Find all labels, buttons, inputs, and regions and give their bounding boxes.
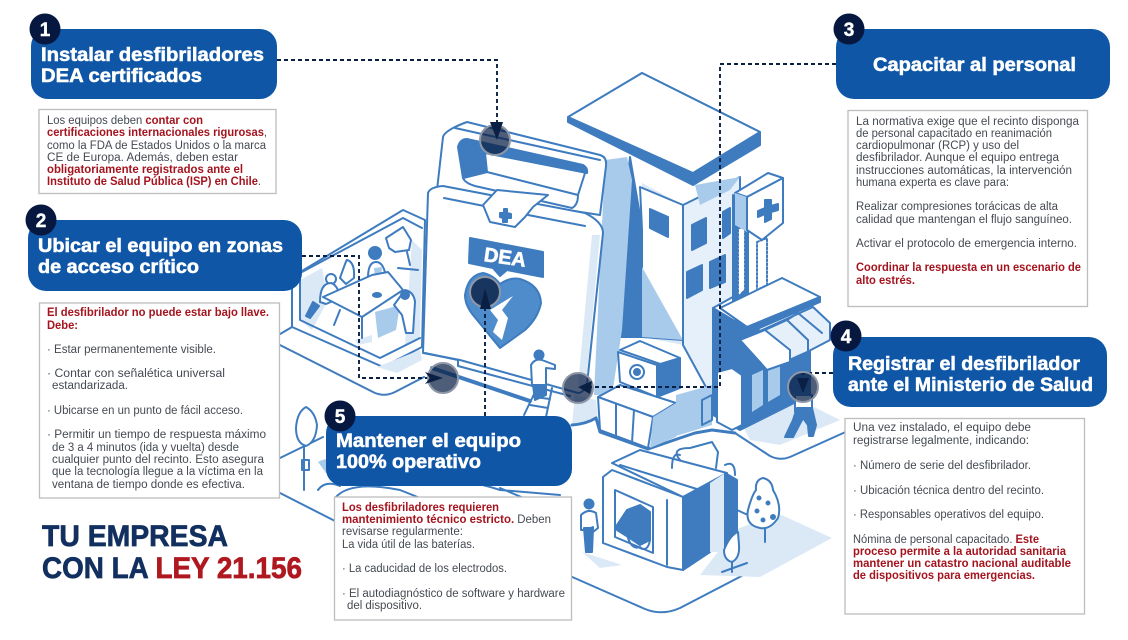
panel 4 text: Una vez instalado, el equipo debe	[853, 422, 1031, 434]
panel 2 header: de acceso crítico	[38, 257, 199, 278]
trees	[296, 407, 779, 572]
panel 2 text: ventana de tiempo donde es efectiva.	[52, 479, 245, 491]
panel 1 text: Los equipos deben contar con	[47, 115, 203, 127]
panel 3 header: 3	[844, 20, 854, 41]
panel 3 text: La normativa exige que el recinto disponga	[856, 116, 1080, 128]
marker 3	[563, 373, 593, 403]
panel 4 text: proceso permite a la autoridad sanitaria	[853, 546, 1067, 558]
panel 2 text: · Contar con señalética universal	[47, 368, 225, 380]
title: TU EMPRESA	[42, 520, 228, 553]
defibrillator case	[423, 122, 632, 401]
panel 2 text: que la tecnología llegue a la víctima en la	[52, 466, 264, 478]
meeting room	[292, 210, 425, 373]
hospital building	[568, 73, 767, 400]
panel 4 text: · Ubicación técnica dentro del recinto.	[853, 485, 1044, 497]
marker 5	[470, 277, 500, 309]
person: walking	[785, 395, 816, 437]
panel 3 text	[848, 110, 1088, 306]
cabinet with device	[598, 341, 712, 448]
panel 1 header: 1	[40, 20, 51, 41]
panel 4 text: de dispositivos para emergencias.	[853, 570, 1035, 582]
panel 4 header: 4	[841, 327, 852, 348]
shop	[713, 278, 830, 430]
panel 5 text: La vida útil de las baterías.	[342, 539, 475, 551]
panel 2 text: estandarizada.	[52, 380, 128, 392]
panel 3 text: de personal capacitado en reanimación	[856, 128, 1052, 140]
panel 3 text: instrucciones automáticas, la intervención	[856, 165, 1072, 177]
panel 1 text	[39, 110, 276, 194]
panel 3 text: Activar el protocolo de emergencia interno.	[856, 238, 1077, 250]
connector 5	[484, 300, 486, 416]
panel 2 header: 2	[36, 211, 46, 232]
connector 1	[277, 60, 497, 130]
panel 4 text: mantener un catastro nacional auditable	[853, 558, 1071, 570]
kiosk building	[603, 442, 737, 570]
marker 2	[425, 363, 458, 393]
panel 2 text: · Ubicarse en un punto de fácil acceso.	[47, 405, 243, 417]
marker 1	[480, 122, 510, 155]
panel 5 text: mantenimiento técnico estricto. Deben	[342, 514, 551, 526]
panel 4 header: ante el Ministerio de Salud	[848, 375, 1093, 396]
panel 5 header: Mantener el equipo	[336, 431, 521, 452]
panel 3 text: desfibrilador. Aunque el equipo entrega	[856, 152, 1060, 164]
panel 1 text: CE de Europa. Además, deben estar	[47, 152, 238, 164]
panel 1 text: obligatoriamente registrados ante el	[47, 164, 243, 176]
panel 2 header: Ubicar el equipo en zonas	[38, 236, 283, 257]
panel 5 text: · El autodiagnóstico de software y hardware	[342, 588, 565, 600]
panel 2 text: · Estar permanentemente visible.	[47, 344, 216, 356]
person: ladder technician	[524, 350, 555, 417]
panel 3 text: calidad que mantengan el flujo sanguíneo.	[856, 214, 1072, 226]
panel 1 text: Instituto de Salud Pública (ISP) en Chile.	[47, 176, 261, 188]
panel 2 text: · Permitir un tiempo de respuesta máximo	[47, 429, 266, 441]
panel 3 text: alto estrés.	[856, 275, 915, 287]
panel 2 text: cualquier punto del recinto. Esto asegura	[52, 454, 265, 466]
panel 4 text: · Número de serie del desfibrilador.	[853, 460, 1031, 472]
panel 1 header: DEA certificados	[41, 66, 202, 87]
panel 5 text: revisarse regularmente:	[342, 526, 463, 538]
panel 5 header: 5	[335, 407, 346, 428]
panel 4 text: registrarse legalmente, indicando:	[853, 435, 1029, 447]
connector 2	[302, 256, 430, 378]
panel 2 text	[40, 303, 280, 498]
title	[42, 520, 302, 585]
marker 4	[788, 372, 818, 402]
defibrillator case: DEA	[483, 244, 527, 272]
panel 4 header: Registrar el desfibrilador	[848, 354, 1081, 375]
panel 5 text: del dispositivo.	[347, 600, 422, 612]
isometric illustration	[270, 73, 850, 612]
title: CON LA LEY 21.156	[42, 552, 302, 585]
panel 1 header: Instalar desfibriladores	[41, 45, 264, 66]
panel 2 text: El desfibrilador no puede estar bajo llave.	[47, 307, 269, 319]
panel 4 header	[830, 320, 1107, 407]
panel 1 text: como la FDA de Estados Unidos o la marca	[47, 140, 267, 152]
panel 2 text: Debe:	[47, 320, 78, 332]
ground platforms	[270, 327, 850, 612]
panel 2 header	[26, 204, 302, 291]
panel 5 header	[324, 400, 572, 486]
panel 4 text	[845, 418, 1084, 614]
panel 4 text: · Responsables operativos del equipo.	[853, 509, 1044, 521]
panel 3 header: Capacitar al personal	[873, 55, 1076, 76]
panel 5 text: · La caducidad de los electrodos.	[342, 563, 507, 575]
panel 3 text: Realizar compresiones torácicas de alta	[856, 201, 1059, 213]
panel 5 header: 100% operativo	[336, 452, 481, 473]
connector 4	[803, 373, 833, 385]
panel 5 text	[334, 497, 572, 620]
panel 2 text: de 3 a 4 minutos (ida y vuelta) desde	[52, 442, 239, 454]
panel 3 header	[834, 14, 1110, 99]
panel 4 text: Nómina de personal capacitado. Este	[853, 534, 1039, 546]
panel 3 text: cardiopulmonar (RCP) y uso del	[856, 140, 1019, 152]
person: standing	[581, 500, 598, 552]
panel 3 text: humana experta es clave para:	[856, 177, 1009, 189]
panel 1 text: certificaciones internacionales rigurosas,	[47, 127, 267, 139]
panel 1 header	[30, 14, 277, 99]
panel 3 text: Coordinar la respuesta en un escenario de	[856, 262, 1081, 274]
panel 5 text: Los desfibriladores requieren	[342, 502, 499, 514]
connector 3	[590, 64, 836, 387]
sign: cross	[735, 173, 783, 240]
